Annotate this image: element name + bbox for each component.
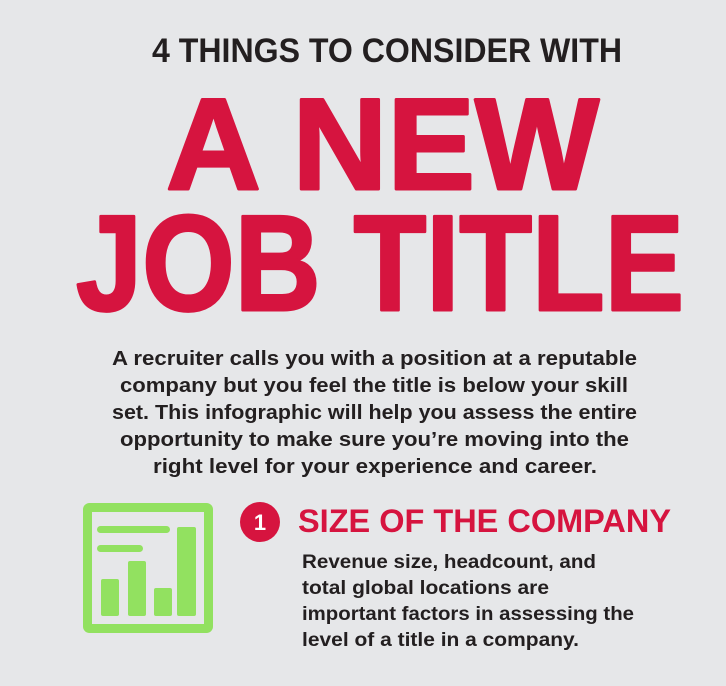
section body [302, 552, 634, 651]
intro paragraph: company but you feel the title is below your skill [120, 375, 628, 397]
intro paragraph [112, 348, 637, 478]
section body: Revenue size, headcount, and [302, 552, 596, 573]
section body: total global locations are [302, 578, 549, 599]
intro paragraph: A recruiter calls you with a position at a reputable [112, 348, 637, 370]
section body: level of a title in a company. [302, 630, 579, 651]
number badge 1: 1 [254, 510, 266, 535]
section body: important factors in assessing the [302, 604, 634, 625]
subtitle heading: 4 THINGS TO CONSIDER WITH [152, 32, 622, 70]
intro paragraph: opportunity to make sure you’re moving into the [120, 429, 629, 451]
intro paragraph: right level for your experience and career. [153, 456, 597, 478]
intro paragraph: set. This infographic will help you assess the entire [112, 402, 637, 424]
section heading: SIZE OF THE COMPANY [298, 503, 671, 539]
number badge 1 [240, 502, 280, 542]
main title: A NEW [166, 71, 599, 217]
main title [76, 71, 684, 339]
icon: bar chart [88, 508, 208, 628]
